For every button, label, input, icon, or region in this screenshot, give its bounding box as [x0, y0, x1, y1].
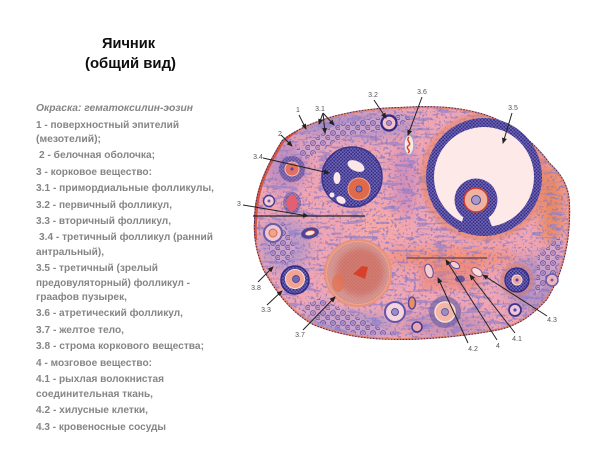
- legend text block: граафов пузырек,: [36, 291, 127, 303]
- image labels: 3: [237, 201, 241, 208]
- image labels: [237, 89, 557, 353]
- medulla: vessels and hilus cells: [420, 260, 484, 290]
- follicle 3.2: primary: [382, 116, 396, 130]
- image labels: 2: [278, 131, 282, 138]
- follicle 3.6: atretic: [404, 135, 414, 155]
- corpus luteum 3.7: [325, 240, 391, 306]
- image labels: 3.6: [417, 89, 427, 96]
- title: (общий вид): [85, 55, 176, 72]
- legend text block: 4.1 - рыхлая волокнистая: [36, 373, 164, 385]
- image labels: 3.3: [261, 307, 271, 314]
- image labels: 3.1: [315, 106, 325, 113]
- title: Яичник: [102, 35, 155, 52]
- legend text block: 4.2 - хилусные клетки,: [36, 404, 148, 416]
- legend text block: 4.3 - кровеносные сосуды: [36, 421, 166, 433]
- legend text block: 3.2 - первичный фолликул,: [36, 199, 172, 211]
- legend text block: соединительная ткань,: [36, 388, 153, 400]
- image labels: 3.7: [295, 332, 305, 339]
- legend text block: Окраска: гематоксилин-эозин: [36, 102, 194, 114]
- image labels: 3.5: [508, 105, 518, 112]
- legend text block: (мезотелий);: [36, 133, 101, 145]
- legend text block: 3.3 - вторичный фолликул,: [36, 215, 171, 227]
- marker line: medulla bracket: [407, 257, 487, 259]
- title: [85, 35, 176, 72]
- follicle 3.4: early antral: [322, 147, 382, 207]
- legend text block: 3.4 - третичный фолликул (ранний: [39, 231, 213, 243]
- legend text block: 3.5 - третичный (зрелый: [36, 262, 158, 274]
- legend text block: 1 - поверхностный эпителий: [36, 119, 179, 131]
- image labels: 4.2: [468, 346, 478, 353]
- legend text block: [36, 102, 214, 433]
- image labels: 3.8: [251, 285, 261, 292]
- image labels: 3.2: [368, 92, 378, 99]
- legend text block: 3.7 - желтое тело,: [36, 324, 124, 336]
- legend text block: предовуляторный) фолликул -: [36, 277, 190, 289]
- capsule edge: [254, 106, 570, 340]
- legend text block: 4 - мозговое вещество:: [36, 357, 152, 369]
- legend text block: 3.6 - атретический фолликул,: [36, 307, 183, 319]
- leader arrows: [243, 97, 547, 343]
- follicle 3.5: graafian: [426, 118, 542, 236]
- legend text block: 3.8 - строма коркового вещества;: [36, 340, 204, 352]
- image labels: 4.3: [547, 317, 557, 324]
- image labels: 3.4: [253, 154, 263, 161]
- marker line: cortex bracket: [253, 215, 365, 217]
- legend text block: 2 - белочная оболочка;: [39, 149, 155, 161]
- legend text block: 3 - корковое вещество:: [36, 166, 152, 178]
- legend text block: антральный),: [36, 246, 104, 258]
- image labels: 1: [296, 107, 300, 114]
- legend text block: 3.1 - примордиальные фолликулы,: [36, 182, 214, 194]
- ovary body: stroma: [245, 100, 580, 345]
- primordial follicles: [264, 114, 562, 335]
- image labels: 4: [496, 343, 500, 350]
- secondary follicles: [264, 156, 558, 332]
- ovary histology section: [245, 100, 580, 345]
- image labels: 4.1: [512, 336, 522, 343]
